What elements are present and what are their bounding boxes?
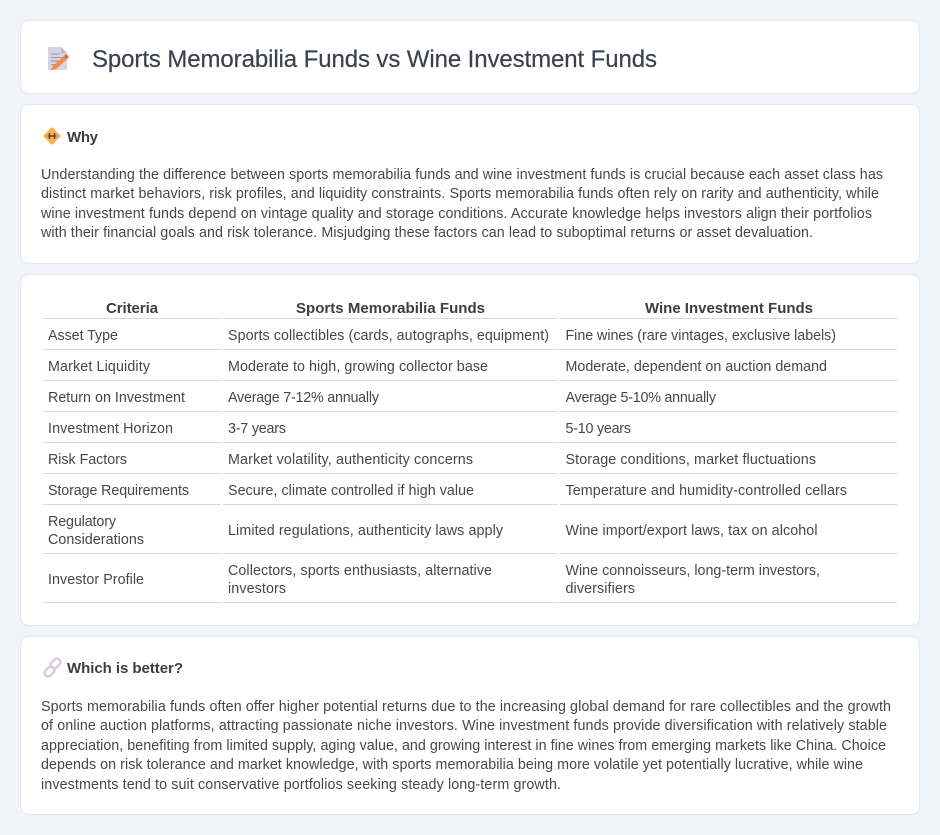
row: regulatory considerations xyxy=(43,514,897,554)
row: investment horizon: 3-7 years xyxy=(228,421,286,437)
row: regulatory considerations: Limited regulations, authenticity laws apply xyxy=(228,523,504,539)
text block: which is better paragraph: Sports memorabilia funds often offer higher potential returns due to the increasing global demand for rare collectibles and the growth xyxy=(41,699,891,715)
row: asset type: Asset Type xyxy=(48,328,118,344)
heading: which is better: Which is better? xyxy=(67,660,183,677)
row: storage requirements: Temperature and humidity-controlled cellars xyxy=(566,483,847,499)
row: storage requirements: Storage Requirements xyxy=(48,483,189,499)
row: investment horizon xyxy=(43,421,897,443)
text block: why paragraph: with their financial goals and risk tolerance. Misjudging these factors can lead to suboptimal returns or asset devaluation. xyxy=(40,225,813,241)
row: risk factors: Storage conditions, market fluctuations xyxy=(566,452,816,468)
row: risk factors: Risk Factors xyxy=(48,452,127,468)
row: market liquidity: Market Liquidity xyxy=(48,359,151,375)
row: market liquidity: Moderate, dependent on auction demand xyxy=(566,359,827,375)
text block: which is better paragraph: investments tend to suit conservative portfolios seeking steady long-term growth. xyxy=(41,777,561,793)
row: regulatory considerations: Wine import/export laws, tax on alcohol xyxy=(566,523,818,539)
text block: which is better paragraph: of online auction platforms, attracting passionate niche investors. Wine investment funds provide diversification with relatively stable xyxy=(41,718,887,734)
table header row: Sports Memorabilia Funds xyxy=(296,300,485,317)
row: investment horizon: 5-10 years xyxy=(566,421,631,437)
row: risk factors xyxy=(43,452,897,474)
panel: which is better xyxy=(20,636,920,814)
row: investor profile: Investor Profile xyxy=(48,572,144,588)
heading: why: Why xyxy=(67,129,99,146)
row: return on investment: Average 5-10% annually xyxy=(566,390,717,406)
row: investor profile xyxy=(43,563,897,603)
row: regulatory considerations: Regulatory xyxy=(48,514,117,530)
row: investor profile: investors xyxy=(228,581,286,597)
icon: chain link xyxy=(43,657,62,678)
row: market liquidity xyxy=(43,359,897,381)
panel: header xyxy=(20,20,920,94)
text block: why paragraph: distinct market behaviors, risk profiles, and liquidity constraints. Sports memorabilia funds often rely on rarity and authenticity, while xyxy=(41,186,879,202)
row: investor profile: diversifiers xyxy=(566,581,635,597)
row: storage requirements xyxy=(43,483,897,505)
row: market liquidity: Moderate to high, growing collector base xyxy=(228,359,488,375)
text block: why paragraph: Understanding the difference between sports memorabilia funds and wine investment funds is crucial because each asset class has xyxy=(41,167,883,183)
row: return on investment: Return on Investment xyxy=(48,390,185,406)
row: risk factors: Market volatility, authenticity concerns xyxy=(228,452,473,468)
row: return on investment xyxy=(43,390,897,412)
text block: which is better paragraph: appreciation, benefiting from limited supply, aging value, and growing interest in fine wines from emerging markets like China. Choice xyxy=(41,738,886,754)
text block: which is better paragraph xyxy=(41,699,891,793)
row: asset type xyxy=(43,328,897,350)
table header row: Wine Investment Funds xyxy=(645,300,813,317)
row: return on investment: Average 7-12% annually xyxy=(228,390,380,406)
row: regulatory considerations: Considerations xyxy=(48,532,144,548)
title: Sports Memorabilia Funds vs Wine Investment Funds xyxy=(92,46,657,73)
icon: document with pencil xyxy=(48,47,69,70)
text block: why paragraph: wine investment funds depend on vintage quality and storage conditions. Accurate knowledge helps investors align their portfolios xyxy=(40,206,872,222)
text block: which is better paragraph: depends on risk tolerance and market knowledge, with sports memorabilia being more volatile yet potentially lucrative, while wine xyxy=(41,757,863,773)
panel: comparison table xyxy=(20,274,920,626)
text block: why paragraph xyxy=(40,167,883,241)
row: asset type: Fine wines (rare vintages, exclusive labels) xyxy=(566,328,836,344)
row: investor profile: Wine connoisseurs, long-term investors, xyxy=(566,563,820,579)
row: asset type: Sports collectibles (cards, autographs, equipment) xyxy=(228,328,549,344)
row: investor profile: Collectors, sports enthusiasts, alternative xyxy=(228,563,492,579)
icon: diamond road sign xyxy=(44,128,60,144)
panel: why xyxy=(20,104,920,264)
row: investment horizon: Investment Horizon xyxy=(48,421,173,437)
row: storage requirements: Secure, climate controlled if high value xyxy=(228,483,474,499)
table header row xyxy=(43,300,897,319)
table header row: Criteria xyxy=(106,300,159,317)
